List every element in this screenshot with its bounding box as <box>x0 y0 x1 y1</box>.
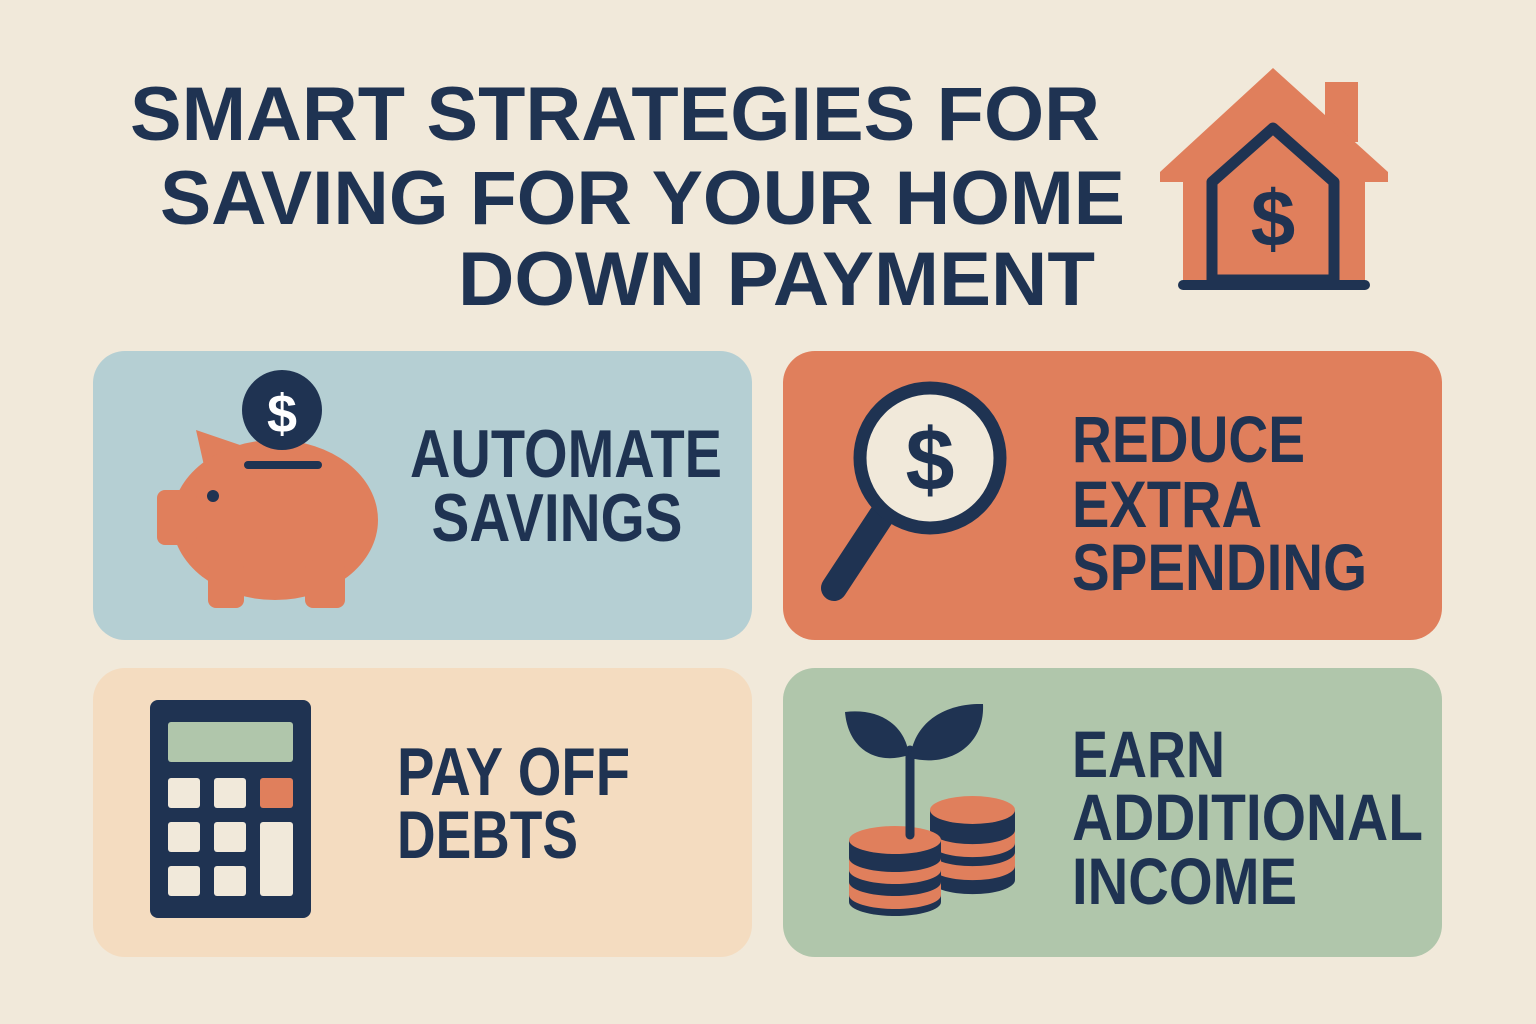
title: SAVING FOR YOUR HOME <box>160 156 1125 241</box>
panel: automate savings <box>93 351 752 640</box>
panel: pay off debts: DEBTS <box>397 797 578 873</box>
title <box>130 72 1125 322</box>
icon: plant and coins <box>845 704 1015 916</box>
panel: automate savings: AUTOMATE <box>410 416 722 492</box>
panel: earn additional income: ADDITIONAL <box>1072 780 1423 854</box>
panel: earn additional income: INCOME <box>1072 844 1297 918</box>
title: SMART STRATEGIES FOR <box>130 72 1100 157</box>
icon: house with dollar <box>1160 68 1388 290</box>
icon: piggy bank: $ <box>267 384 297 444</box>
icon: magnifier: $ <box>906 410 954 509</box>
panel: pay off debts: PAY OFF <box>397 734 630 810</box>
icon: piggy bank <box>157 370 378 608</box>
panel: automate savings: SAVINGS <box>432 480 682 556</box>
panel: pay off debts <box>93 668 752 957</box>
panel: earn additional income: EARN <box>1072 717 1225 791</box>
icon: calculator <box>150 700 311 918</box>
panel: reduce extra spending <box>783 351 1442 640</box>
title: DOWN PAYMENT <box>458 237 1095 322</box>
icon: magnifier <box>834 388 1000 588</box>
panel: reduce extra spending: EXTRA <box>1072 467 1262 541</box>
panel: reduce extra spending: REDUCE <box>1072 402 1305 476</box>
icon: house with dollar: $ <box>1251 174 1295 263</box>
panel: reduce extra spending: SPENDING <box>1072 530 1367 604</box>
panel: earn additional income <box>783 668 1442 957</box>
